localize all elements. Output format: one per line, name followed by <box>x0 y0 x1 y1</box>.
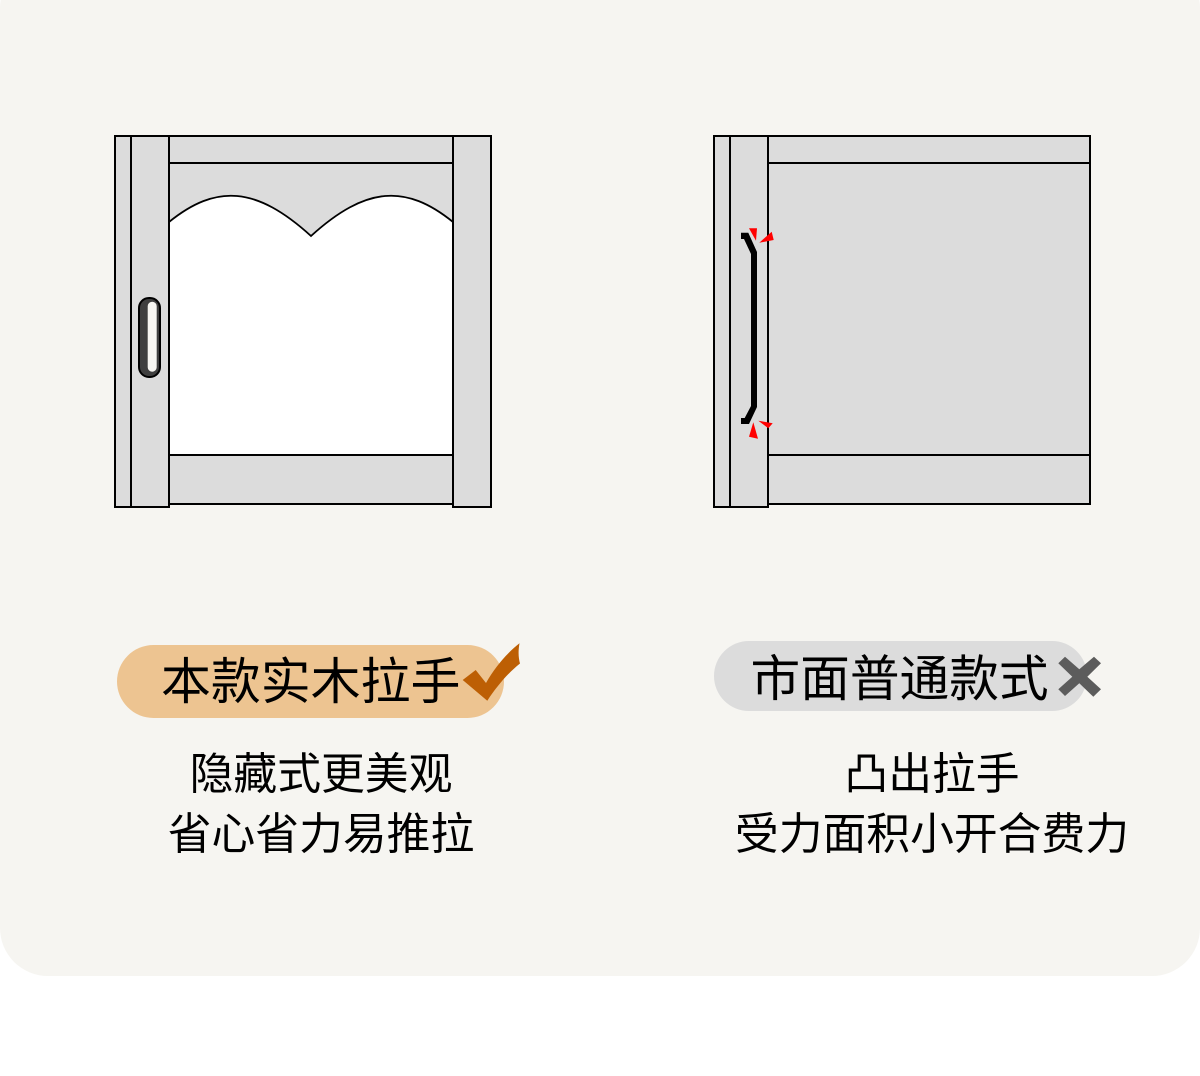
icon: red pressure marks <box>749 228 774 439</box>
icon: check mark <box>463 643 520 701</box>
text: left description: 省心省力易推拉 <box>168 810 474 859</box>
text: right description: 凸出拉手 <box>844 750 1020 799</box>
heading: common style: 市面普通款式 <box>750 651 1049 707</box>
text: left description <box>168 750 474 859</box>
heading: solid wood handle: 本款实木拉手 <box>161 654 460 710</box>
label pill: common style <box>714 641 1087 711</box>
text: right description: 受力面积小开合费力 <box>735 810 1129 859</box>
icon: protruding handle bar <box>741 233 757 424</box>
label pill: solid wood handle <box>117 645 504 718</box>
diagram: protruding handle door <box>714 136 1090 507</box>
icon: recessed handle <box>139 298 160 377</box>
text: left description: 隐藏式更美观 <box>190 750 452 799</box>
icon: cross mark <box>1058 657 1101 697</box>
text: right description <box>735 750 1129 859</box>
diagram: hidden wood handle door <box>115 136 491 507</box>
